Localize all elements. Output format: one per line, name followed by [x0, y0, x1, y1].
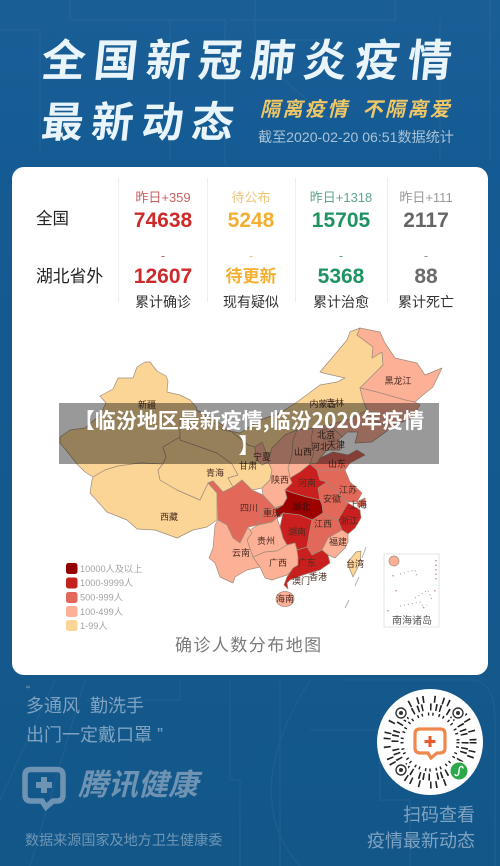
province: Anhui — [318, 482, 348, 520]
province labels: 河北 — [311, 441, 329, 452]
title line 1: 全国新冠肺炎疫情 — [39, 37, 463, 86]
dash: - — [424, 248, 428, 263]
divider 2 — [207, 178, 208, 302]
legend 1-99: 1-99人 — [80, 621, 108, 631]
province: Yunnan — [209, 520, 260, 583]
article title overlay: 】 — [238, 430, 260, 460]
province: Hebei — [310, 425, 342, 464]
province: Hunan — [280, 513, 312, 550]
province: Gansu — [180, 410, 272, 490]
legend 100-499: 100-499人 — [80, 607, 123, 617]
column: suspected — [223, 190, 279, 310]
national suspected: 5248 — [228, 209, 274, 232]
dash: - — [249, 248, 253, 263]
national confirmed: 74638 — [134, 209, 192, 232]
province labels: 香港 — [309, 571, 327, 582]
province labels: 北京 — [317, 429, 335, 440]
province labels: 澳门 — [292, 575, 310, 586]
province: Sichuan — [208, 480, 275, 543]
centre logo — [409, 721, 451, 763]
province labels — [138, 375, 412, 604]
province labels: 四川 — [240, 503, 258, 513]
province labels: 天津 — [327, 440, 345, 450]
province: Xinjiang — [60, 362, 197, 477]
province labels: 青海 — [206, 467, 224, 478]
dash: - — [161, 248, 165, 263]
province labels: 上海 — [349, 499, 367, 510]
province: Fujian — [322, 530, 348, 558]
province labels: 台湾 — [346, 558, 364, 569]
legend — [66, 563, 142, 631]
outside Hubei recovered: 5368 — [318, 265, 364, 288]
province labels: 新疆 — [138, 399, 156, 410]
province labels: 安徽 — [323, 493, 341, 504]
logo icon — [22, 766, 66, 811]
province labels: 内蒙古 — [309, 398, 337, 409]
tip line 2: 出门一定戴口罩 ” — [26, 725, 163, 745]
update time: 截至2020-02-20 06:51数据统计 — [258, 129, 454, 145]
province: Shaanxi — [262, 430, 297, 508]
map caption: 确诊人数分布地图 — [175, 636, 323, 655]
province: Guizhou — [247, 518, 287, 557]
daily change: 昨日+359 — [135, 190, 191, 205]
province: Hainan — [276, 592, 294, 606]
province labels: 西藏 — [160, 511, 178, 522]
province: Guangxi — [253, 543, 298, 580]
national deaths: 2117 — [403, 209, 449, 232]
province: Heilongjiang — [357, 328, 442, 402]
province labels: 吉林 — [326, 397, 344, 408]
title — [39, 37, 463, 146]
column: deaths — [398, 190, 454, 310]
pending update: 待更新 — [226, 267, 276, 286]
Tencent Health logo — [22, 766, 202, 811]
national recovered: 15705 — [312, 209, 370, 232]
province: Liaoning — [330, 410, 395, 443]
pending label: 待公布 — [231, 190, 271, 205]
scan prompt: 扫码查看 — [403, 805, 475, 825]
province labels: 河南 — [298, 477, 316, 488]
province labels: 湖北 — [292, 502, 310, 512]
province: Shandong — [310, 450, 365, 470]
province: Jiangsu — [317, 470, 362, 502]
health tip — [26, 683, 163, 745]
province labels: 甘肃 — [239, 460, 257, 471]
province labels: 福建 — [329, 536, 347, 547]
column: recovered — [310, 190, 372, 310]
outside Hubei deaths: 88 — [414, 265, 438, 288]
data source: 数据来源国家及地方卫生健康委 — [25, 832, 222, 848]
province labels: 浙江 — [340, 515, 358, 526]
legend 1000-9999: 1000-9999人 — [80, 578, 133, 588]
row label: national: 全国 — [36, 210, 69, 228]
article title overlay — [59, 403, 439, 464]
column caption: 累计治愈 — [313, 294, 369, 310]
province labels: 山东 — [328, 458, 346, 469]
divider 3 — [295, 178, 296, 302]
article title overlay: 【临汾地区最新疫情,临汾2020年疫情 — [74, 405, 424, 435]
column caption: 累计确诊 — [135, 294, 191, 310]
province labels: 重庆 — [263, 507, 281, 518]
column caption: 累计死亡 — [398, 294, 454, 310]
legend 10000+: 10000人及以上 — [80, 564, 142, 574]
province labels: 广东 — [298, 557, 316, 568]
province: Chongqing — [258, 505, 283, 525]
province labels: 山西 — [294, 447, 312, 457]
slogan: 隔离疫情 不隔离爱 — [260, 99, 452, 121]
tip line 1: 多通风 勤洗手 — [26, 696, 144, 716]
logo wordmark: 腾讯健康 — [78, 769, 198, 802]
finder ring top left — [394, 706, 408, 720]
province: Tibet — [90, 463, 217, 538]
column caption: 现有疑似 — [223, 294, 279, 310]
province: Jilin — [360, 388, 420, 425]
province: Henan — [285, 464, 327, 500]
province labels: 贵州 — [257, 535, 275, 546]
daily change: 昨日+1318 — [310, 190, 372, 205]
province: Beijing — [322, 428, 334, 440]
province labels: 湖南 — [288, 526, 306, 537]
province: Tianjin — [332, 440, 340, 450]
province labels: 广西 — [269, 557, 287, 568]
dash: - — [339, 248, 343, 263]
finder ring top right — [450, 706, 466, 720]
title line 2: 最新动态 — [39, 99, 244, 146]
province: Hubei — [275, 490, 323, 520]
inset: South China Sea — [384, 554, 439, 627]
QR code — [377, 689, 483, 795]
row label: outside Hubei: 湖北省外 — [36, 267, 103, 286]
province labels: 海南 — [276, 593, 294, 604]
inset label: 南海诸岛 — [392, 614, 432, 627]
mini program badge — [449, 761, 469, 781]
province labels: 云南 — [232, 547, 250, 558]
province: Jiangxi — [307, 513, 342, 555]
divider 1 — [118, 178, 119, 302]
legend 500-999: 500-999人 — [80, 592, 123, 602]
province labels: 黑龙江 — [384, 375, 412, 386]
outside Hubei confirmed: 12607 — [134, 265, 192, 288]
province: Qinghai — [158, 437, 238, 500]
daily change: 昨日+111 — [399, 190, 453, 205]
divider 4 — [387, 178, 388, 302]
opening quote: “ — [26, 683, 30, 697]
province: Taiwan — [348, 551, 361, 577]
province: Inner Mongolia — [197, 328, 383, 465]
province: Shanxi — [288, 428, 314, 478]
province: Zhejiang — [338, 503, 361, 534]
finder ring bottom left — [394, 762, 408, 778]
province: Ningxia — [255, 442, 268, 465]
province labels: 江苏 — [339, 484, 357, 495]
province labels: 陕西 — [271, 474, 289, 485]
province labels: 宁夏 — [253, 451, 271, 462]
island dashes — [345, 547, 366, 608]
scan prompt: 疫情最新动态 — [367, 831, 475, 851]
province labels: 江西 — [314, 519, 332, 529]
column: confirmed — [134, 190, 192, 310]
province: Guangdong — [284, 547, 330, 589]
panel: main card — [12, 167, 488, 675]
scan prompt — [367, 805, 475, 851]
province: Shanghai — [357, 498, 366, 507]
